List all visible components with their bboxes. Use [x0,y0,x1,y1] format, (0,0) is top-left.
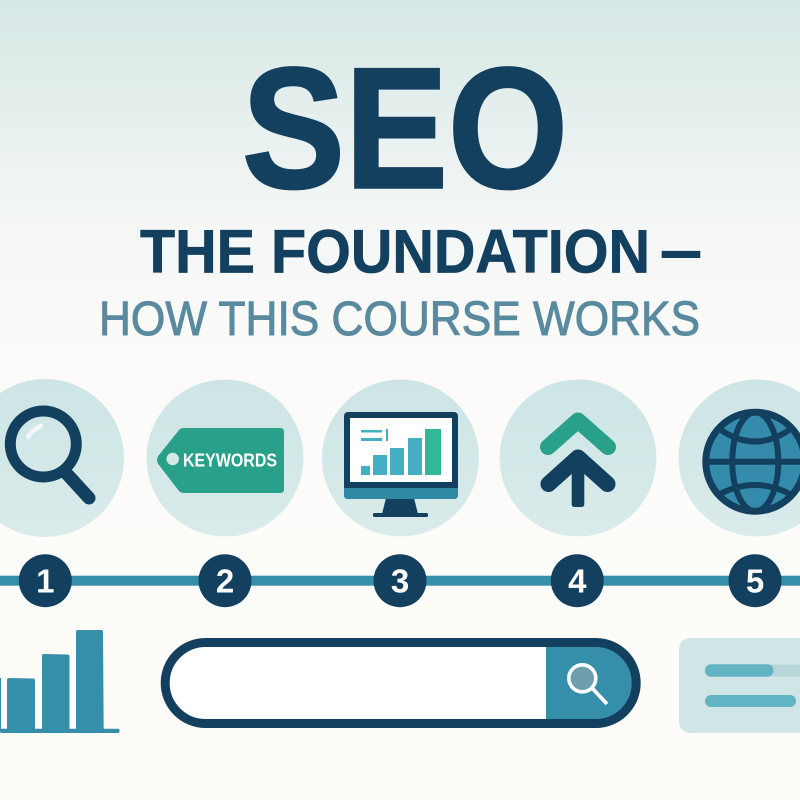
step 3: 3 [391,562,409,600]
heading: The Foundation: THE FOUNDATION [140,218,650,286]
step 4 [551,554,604,607]
subheading: how this course works: HOW THIS COURSE WORKS [99,292,700,346]
search bar [165,642,636,724]
step 2: 2 [216,562,234,600]
content card [679,638,800,733]
step 4: 4 [568,562,587,600]
bar chart [0,630,120,733]
icon: monitor with bar chart [322,380,479,536]
step 2 [198,554,252,607]
icon: keywords tag: KEYWORDS [183,450,277,470]
step 1: 1 [36,562,54,600]
icon: globe [678,380,800,536]
step 5: 5 [746,562,764,600]
heading dash: — [662,216,700,285]
title: SEO: SEO [242,32,568,224]
timeline line [0,576,800,586]
icon: keywords tag [146,380,304,536]
step 3 [374,554,426,607]
step 5 [728,554,782,607]
icon: magnifying glass [0,379,124,537]
icon: upward arrows [500,380,656,536]
icon: search button magnifier [569,665,607,704]
step 1 [19,554,72,607]
